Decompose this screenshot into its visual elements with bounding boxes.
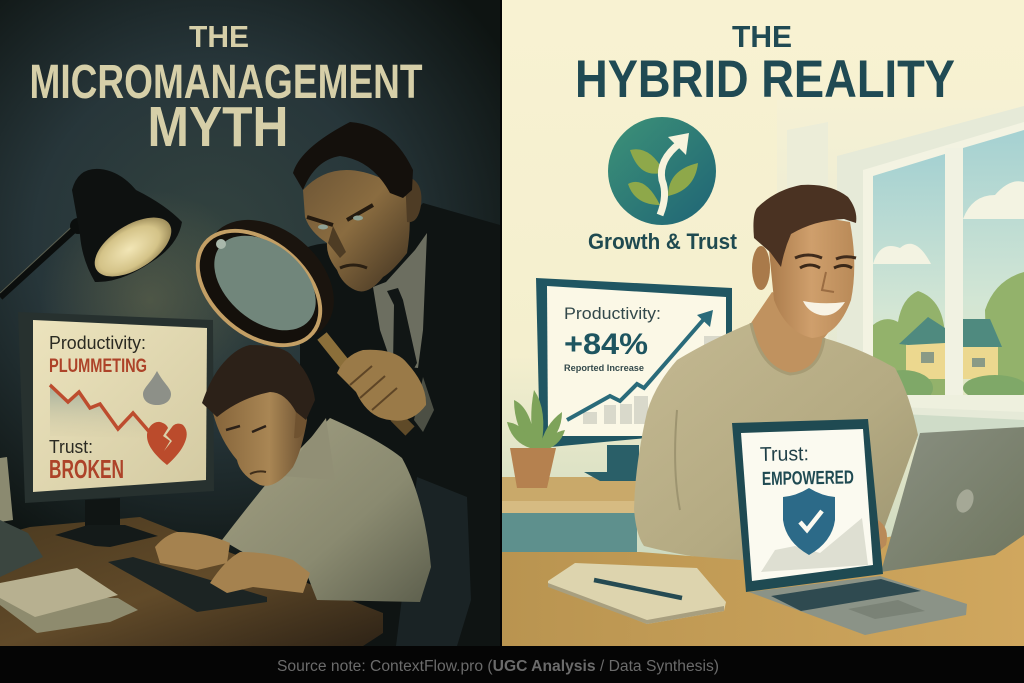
employee hands	[155, 532, 310, 593]
stressed employee	[202, 345, 431, 602]
left panel title: MYTH	[148, 95, 288, 159]
monitor: productivity plummeting: BROKEN	[49, 454, 124, 484]
monitor: productivity up	[536, 278, 732, 481]
trees	[873, 272, 1024, 395]
icon: broken heart	[147, 422, 187, 465]
desk lamp	[0, 169, 182, 297]
manager figure	[293, 122, 500, 646]
face and hair	[752, 185, 856, 338]
curtain	[787, 122, 828, 340]
paper stack and tray	[0, 457, 138, 633]
right panel title: THE	[732, 19, 792, 54]
monitor: productivity plummeting: Trust:	[49, 436, 93, 457]
falling line chart	[50, 383, 152, 438]
manager suit	[300, 203, 500, 646]
monitor: productivity up: +84%	[564, 328, 648, 361]
manager hand	[337, 350, 434, 432]
front laptop: trust empowered: Trust:	[760, 443, 809, 466]
monitor: productivity up: Reported Increase	[564, 363, 644, 374]
right panel title	[575, 19, 955, 109]
neck	[751, 292, 840, 374]
notebook and pen	[548, 563, 726, 624]
source note: Source note: ContextFlow.pro (UGC Analysis / Data Synthesis)	[277, 658, 719, 675]
keyboard	[108, 557, 267, 612]
desk	[502, 516, 1024, 646]
employee head	[202, 345, 315, 486]
monitor: productivity plummeting: Productivity:	[49, 332, 146, 353]
employee shirt	[222, 418, 431, 602]
right panel title: HYBRID REALITY	[575, 50, 955, 109]
manager head	[293, 122, 421, 291]
potted plant	[507, 390, 565, 488]
front laptop: trust empowered	[732, 419, 967, 635]
clouds	[873, 181, 1024, 264]
leaves	[628, 149, 698, 205]
manager shirt and tie	[373, 233, 427, 385]
left panel title	[30, 19, 422, 159]
monitor: productivity plummeting	[18, 312, 214, 547]
office chair	[396, 477, 471, 646]
window with garden view	[837, 106, 1024, 440]
logo: growth and trust	[588, 117, 738, 254]
icon: shield	[783, 488, 835, 555]
shelf	[502, 477, 650, 553]
growth chart	[567, 310, 724, 424]
panel: the hybrid reality	[502, 0, 1024, 646]
left panel title: MICROMANAGEMENT	[30, 56, 422, 109]
front laptop: trust empowered: EMPOWERED	[762, 467, 854, 490]
smiling employee	[634, 185, 918, 561]
monitor: productivity plummeting: PLUMMETING	[49, 356, 147, 377]
growth arrow	[660, 143, 680, 215]
open laptop, rear	[878, 427, 1024, 572]
sweater	[634, 323, 918, 561]
icon: grey drop	[143, 371, 171, 405]
panel: the micromanagement myth	[0, 0, 500, 646]
monitor: productivity up: Productivity:	[564, 304, 661, 323]
houses	[899, 317, 1002, 379]
left panel title: THE	[189, 19, 249, 54]
logo: growth and trust: Growth & Trust	[588, 229, 738, 254]
magnifying glass	[173, 195, 410, 431]
desk	[0, 517, 383, 646]
